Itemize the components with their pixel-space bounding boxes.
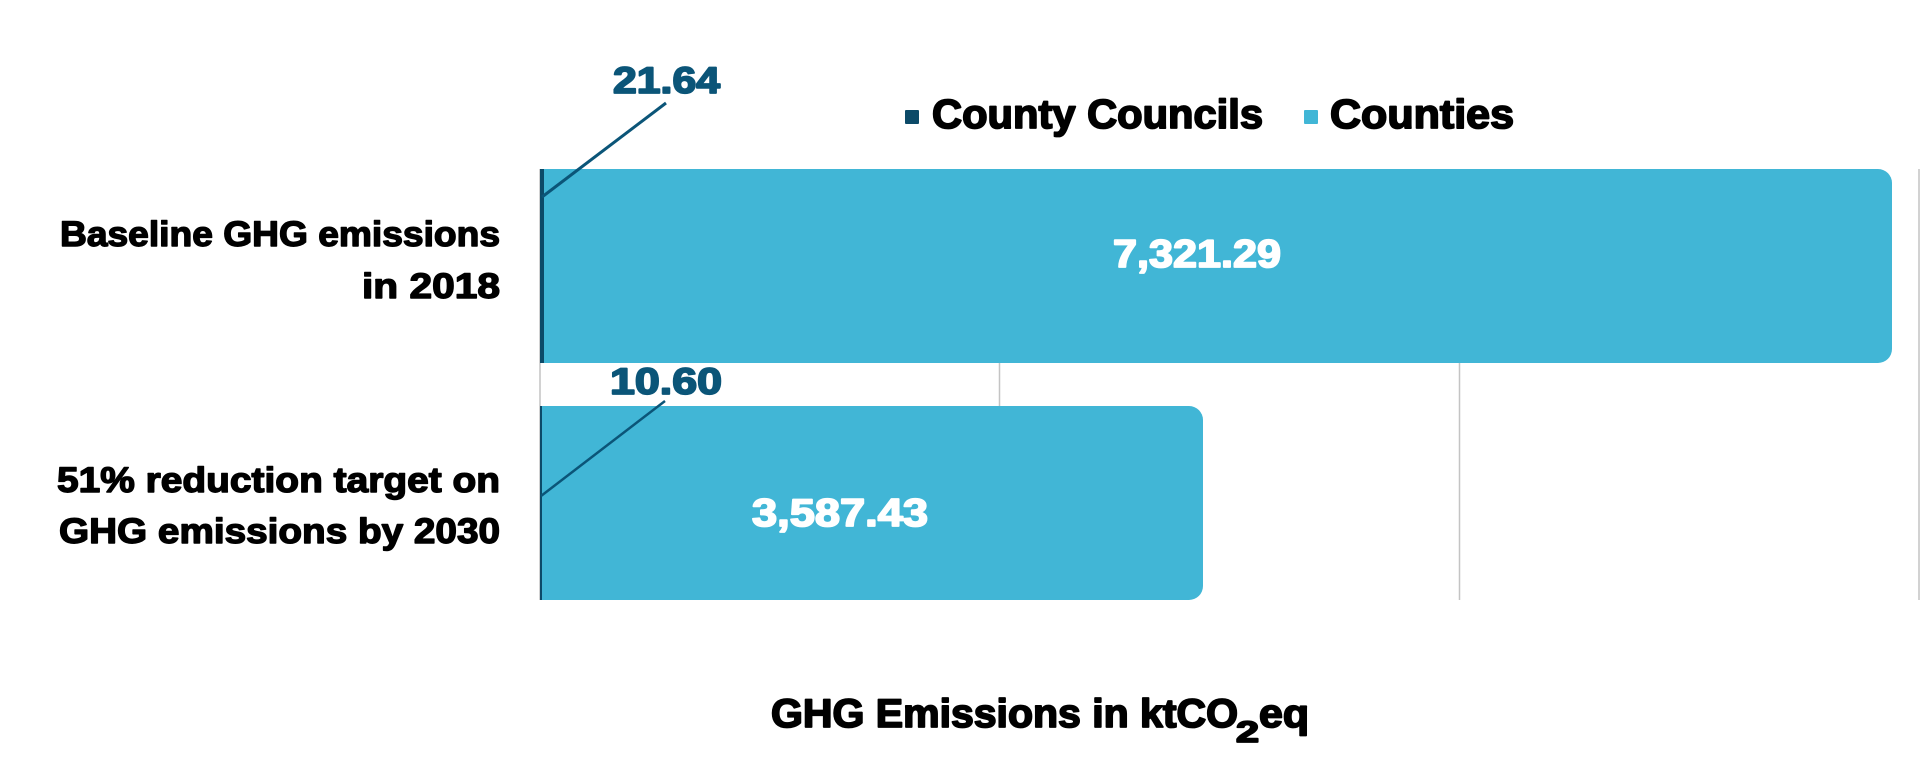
legend	[905, 91, 1514, 137]
bar: County Councils baseline	[540, 169, 544, 363]
value: 3,587.43: 3,587.43	[752, 492, 928, 535]
legend: County Councils: County Councils	[932, 91, 1263, 137]
axis title: GHG Emissions in ktCO	[771, 692, 1238, 736]
axis title: 2	[1236, 716, 1259, 749]
legend: Counties: Counties	[1330, 91, 1514, 137]
label: Baseline GHG emissions in 2018	[60, 215, 500, 306]
label: 51% reduction target on GHG emissions by 2030: GHG emissions by 2030	[59, 512, 500, 551]
label: Baseline GHG emissions in 2018: Baseline GHG emissions	[60, 215, 500, 254]
row: Baseline 2018	[60, 60, 1892, 363]
value: 10.60: 10.60	[610, 361, 722, 402]
axis title	[771, 692, 1309, 749]
axis title: eq	[1259, 692, 1309, 736]
row: 2030 target	[57, 361, 1203, 600]
value: 21.64: 21.64	[613, 60, 720, 101]
leader line: 10.60	[541, 401, 665, 496]
bar: Counties baseline	[540, 169, 1892, 363]
label: Baseline GHG emissions in 2018: in 2018	[362, 267, 500, 306]
bar: Counties target	[540, 406, 1203, 600]
label: 51% reduction target on GHG emissions by 2030	[57, 461, 500, 551]
leader line: 21.64	[542, 103, 666, 197]
bar: County Councils target	[540, 406, 542, 600]
label: 51% reduction target on GHG emissions by 2030: 51% reduction target on	[57, 461, 500, 500]
value: 7,321.29: 7,321.29	[1113, 233, 1281, 276]
